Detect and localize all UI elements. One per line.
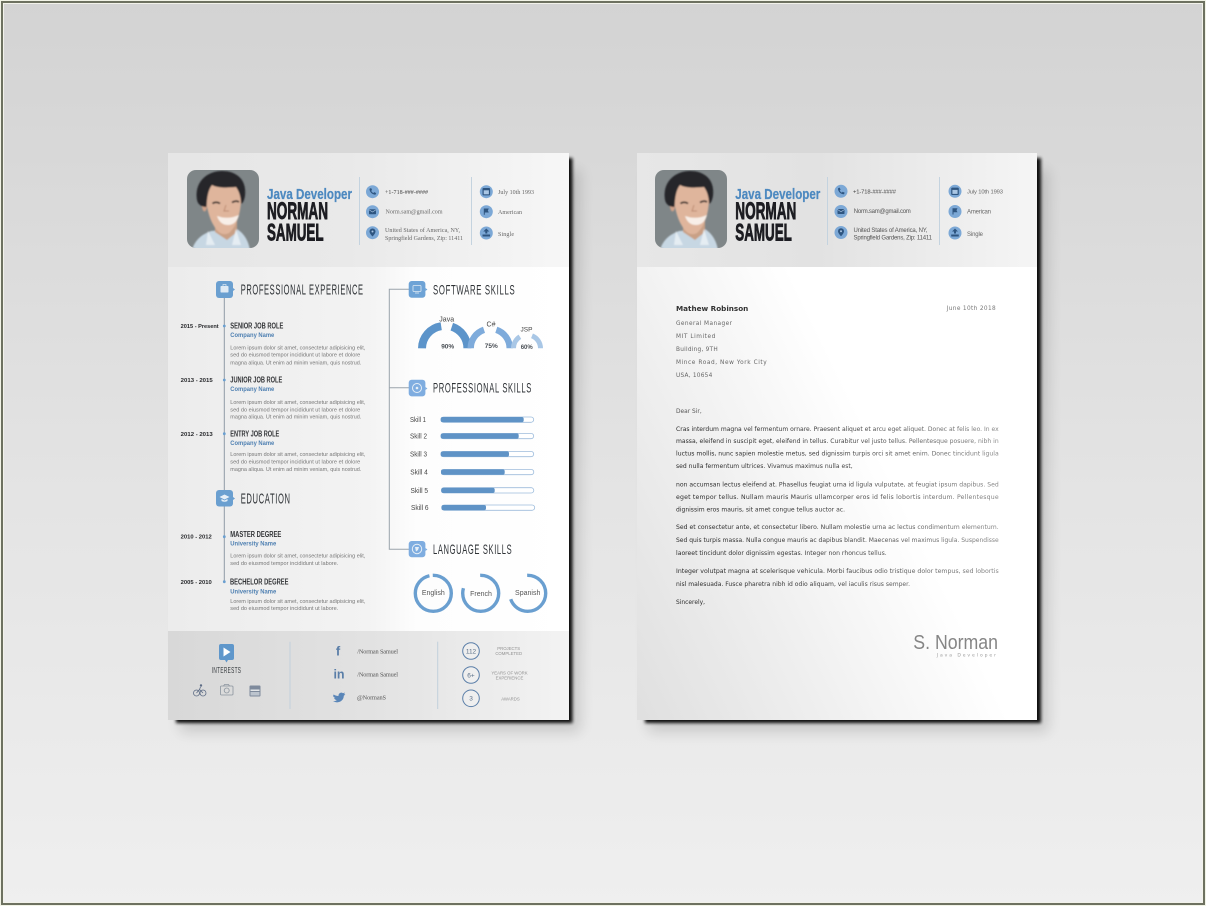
icon: flag bbox=[480, 205, 493, 218]
signature: Java Developer bbox=[936, 652, 996, 658]
entry: junior job role: 2013 - 2015 bbox=[181, 378, 213, 384]
stat: years of experience: 6+ bbox=[467, 672, 475, 679]
icon: briefcase bbox=[216, 281, 235, 298]
stat: projects completed: PROJECTS bbox=[497, 646, 520, 651]
contact dividers bbox=[828, 177, 940, 245]
entry: senior job role: Company Name bbox=[230, 333, 275, 339]
icon: location bbox=[366, 226, 379, 239]
entry: bachelor degree: BECHELOR DEGREE bbox=[230, 578, 289, 586]
paragraph 2: eget tempor tellus. Nullam mauris Mauris ullamcorper eros id felis lobortis interdum. Pellentesque bbox=[676, 494, 999, 501]
linkedin handle: /Norman Samuel bbox=[357, 672, 398, 679]
paragraph 4 bbox=[676, 568, 999, 588]
icon: location bbox=[834, 226, 848, 239]
icon: mail bbox=[366, 205, 379, 218]
paragraph 1: sed nulla fermentum ultrices. Vivamus maximus nulla est, bbox=[676, 463, 853, 470]
stat: awards bbox=[463, 690, 520, 707]
bar: skill 4: Skill 4 bbox=[410, 468, 428, 476]
entry: bachelor degree: University Name bbox=[230, 589, 277, 595]
entry: entry job role: Company Name bbox=[230, 441, 275, 447]
bar: skill 1: Skill 1 bbox=[410, 415, 426, 424]
entry: bachelor degree bbox=[181, 578, 366, 612]
footer dividers bbox=[290, 642, 438, 709]
recipient details: Mince Road, New York City bbox=[676, 360, 767, 366]
address bbox=[385, 227, 463, 242]
entry: senior job role bbox=[181, 322, 366, 366]
address: Springfield Gardens, Zip: 11411 bbox=[385, 235, 463, 242]
recipient details: Building, 9TH bbox=[676, 347, 718, 353]
entry: entry job role bbox=[181, 430, 366, 473]
paragraph 3 bbox=[676, 524, 999, 557]
name: NORMAN bbox=[267, 198, 328, 225]
icon: calendar bbox=[480, 185, 493, 198]
bar: skill 3: Skill 3 bbox=[410, 450, 427, 458]
arc percentages: 75% bbox=[485, 343, 498, 350]
paragraph 3: Sed quis turpis massa. Nulla congue mauris ac dapibus blandit. Maecenas vel maximus ligula. Suspendisse bbox=[676, 537, 999, 544]
stat: years of experience: YEARS OF WORK bbox=[491, 670, 528, 675]
entry: senior job role: Lorem ipsum dolor sit amet, consectetur adipisicing elit, bbox=[230, 345, 366, 351]
photo bbox=[187, 170, 259, 250]
address: United States of America, NY, bbox=[854, 228, 928, 234]
marital status: Single bbox=[498, 232, 514, 238]
entry: master degree bbox=[181, 530, 366, 567]
paragraph 4: Integer volutpat magna at scelerisque vehicula. Morbi faucibus odio tristique dolor tempus, sed lobortis bbox=[676, 568, 999, 575]
entry: senior job role: SENIOR JOB ROLE bbox=[230, 322, 284, 331]
icon: linkedin: in bbox=[333, 668, 345, 682]
paragraph 2: dignissim eros mauris, sit amet congue tellus auctor ac. bbox=[676, 506, 845, 514]
paragraph 1: Cras interdum magna vel fermentum ornare. Praesent aliquet et arcu eget aliquet. Donec at felis leo. In ex bbox=[676, 426, 999, 433]
name: NORMAN bbox=[735, 198, 796, 225]
entry: junior job role: sed do eiusmod tempor incididunt ut labore et dolore bbox=[230, 407, 360, 413]
paragraph 4: nisl malesuada. Fusce pharetra nibh id odio aliquam, vel iaculis risus semper. bbox=[676, 581, 910, 588]
stat: years of experience: EXPERIENCE bbox=[496, 675, 523, 680]
birth date: July 10th 1993 bbox=[967, 190, 1003, 196]
chart: software skill arcs bbox=[422, 316, 540, 351]
arc labels: JSP bbox=[521, 326, 532, 334]
paragraph 2 bbox=[676, 482, 999, 514]
icon: status bbox=[948, 226, 962, 240]
timeline line bbox=[223, 298, 225, 582]
panel: resume header bbox=[168, 153, 569, 267]
heading: professional experience: PROFESSIONAL EXPERIENCE bbox=[241, 282, 364, 298]
facebook handle: /Norman Samuel bbox=[357, 648, 398, 655]
entry: entry job role: 2012 - 2013 bbox=[181, 432, 213, 438]
entry: senior job role: magna aliqua. Ut enim ad minim veniam, quis nostrud. bbox=[230, 360, 362, 366]
heading: education: EDUCATION bbox=[241, 492, 291, 508]
arc percentages: 60% bbox=[521, 345, 533, 351]
email: Norm.sam@gmail.com bbox=[386, 210, 443, 216]
entry: bachelor degree: 2005 - 2010 bbox=[181, 580, 212, 586]
icon: language bbox=[409, 541, 427, 557]
icon: flag bbox=[948, 205, 962, 218]
name: SAMUEL bbox=[267, 220, 324, 246]
icon: status bbox=[480, 226, 493, 240]
chart: language rings bbox=[415, 575, 546, 611]
twitter handle: @NormanS bbox=[357, 694, 386, 702]
bar: skill 6: Skill 6 bbox=[411, 503, 428, 512]
name bbox=[735, 198, 796, 246]
icon: film bbox=[250, 686, 260, 696]
icon: phone bbox=[834, 185, 848, 198]
email: Norm.sam@gmail.com bbox=[854, 209, 911, 215]
entry: junior job role bbox=[181, 376, 366, 421]
paragraph 1 bbox=[676, 426, 999, 470]
address: United States of America, NY, bbox=[385, 227, 460, 234]
icon: graduation cap bbox=[216, 490, 235, 506]
job title: Java Developer bbox=[267, 187, 352, 203]
photo bbox=[655, 170, 727, 250]
phone number: +1-718-###-#### bbox=[385, 190, 428, 196]
ring: french: French bbox=[470, 591, 492, 598]
phone number: +1-718-###-#### bbox=[853, 190, 897, 196]
heading: software skills: SOFTWARE SKILLS bbox=[433, 281, 515, 297]
entry: junior job role: JUNIOR JOB ROLE bbox=[230, 376, 283, 385]
stat: projects completed: COMPLETED bbox=[495, 651, 522, 656]
paragraph 1: massa, eleifend in suscipit eget, eleifend in tellus. Curabitur vel justo tellus. Pellentesque posuere, nibh in bbox=[676, 438, 999, 445]
arc percentages: 90% bbox=[441, 344, 454, 350]
recipient details bbox=[676, 321, 767, 379]
birth date: July 10th 1993 bbox=[498, 190, 534, 196]
entry: junior job role: Lorem ipsum dolor sit amet, consectetur adipisicing elit, bbox=[230, 400, 366, 406]
panel: cover letter page bbox=[637, 153, 1037, 720]
arc percentages bbox=[441, 343, 533, 351]
job title: Java Developer bbox=[735, 187, 821, 203]
icon: software bbox=[409, 281, 427, 298]
ring: spanish: Spanish bbox=[515, 590, 540, 597]
recipient name: Mathew Robinson bbox=[676, 304, 748, 313]
recipient details: MIT Limited bbox=[676, 334, 716, 340]
stat: awards: 3 bbox=[469, 696, 473, 703]
stat: awards: AWARDS bbox=[501, 696, 520, 702]
address bbox=[854, 228, 933, 242]
salutation: Dear Sir, bbox=[676, 408, 702, 415]
icon: twitter bbox=[333, 692, 345, 702]
entry: master degree: 2010 - 2012 bbox=[181, 535, 212, 541]
name: SAMUEL bbox=[735, 220, 792, 246]
entry: entry job role: magna aliqua. Ut enim ad minim veniam, quis nostrud. bbox=[230, 467, 362, 473]
arc: java bbox=[422, 326, 467, 348]
signature: S. Norman bbox=[913, 632, 998, 654]
arc: c sharp bbox=[471, 330, 510, 348]
panel: experience timeline bbox=[181, 281, 366, 612]
stat: projects completed bbox=[463, 643, 522, 659]
panel: skills column bbox=[389, 281, 546, 611]
panel: resume page bbox=[168, 153, 569, 720]
stat: projects completed: 112 bbox=[466, 648, 477, 655]
entry: entry job role: sed do eiusmod tempor incididunt ut labore et dolore bbox=[230, 459, 360, 465]
paragraph 3: Sed et consectetur ante, et consectetur libero. Nullam molestie urna ac lectus condimentum elementum. bbox=[676, 524, 999, 531]
entry: junior job role: magna aliqua. Ut enim ad minim veniam, quis nostrud. bbox=[230, 415, 362, 421]
entry: master degree: University Name bbox=[230, 541, 277, 547]
icon: professional bbox=[409, 380, 427, 396]
arc labels: C# bbox=[487, 322, 496, 328]
icon: phone bbox=[366, 185, 379, 198]
heading: language skills: LANGUAGE SKILLS bbox=[433, 541, 512, 557]
recipient details: General Manager bbox=[676, 321, 733, 327]
closing: Sincerely, bbox=[676, 599, 705, 606]
heading: interests: INTERESTS bbox=[212, 666, 241, 675]
paragraph 1: luctus mollis, nunc sapien molestie metus, sed dignissim turpis orci sit amet enim. Donec tincidunt ligula bbox=[676, 450, 999, 458]
icon: interests play bbox=[219, 644, 234, 662]
entry: entry job role: ENTRY JOB ROLE bbox=[230, 430, 280, 438]
entry: master degree: sed do eiusmod tempor incididunt ut labore. bbox=[230, 561, 339, 567]
bar: skill 5: Skill 5 bbox=[410, 486, 428, 495]
icon: calendar bbox=[948, 185, 962, 198]
entry: senior job role: 2015 - Present bbox=[181, 324, 219, 330]
panel: letter header bbox=[637, 153, 1037, 267]
entry: master degree: Lorem ipsum dolor sit amet, consectetur adipisicing elit, bbox=[230, 553, 366, 559]
entry: bachelor degree: Lorem ipsum dolor sit amet, consectetur adipisicing elit, bbox=[230, 599, 366, 605]
stat: years of experience bbox=[463, 667, 528, 683]
address: Springfield Gardens, Zip: 11411 bbox=[854, 236, 933, 242]
nationality: American bbox=[498, 210, 522, 216]
heading: professional skills: PROFESSIONAL SKILLS bbox=[433, 380, 532, 396]
recipient block bbox=[676, 304, 767, 379]
chart: skill bars bbox=[410, 415, 535, 512]
nationality: American bbox=[967, 210, 991, 216]
name bbox=[267, 198, 328, 246]
arc: jsp bbox=[514, 336, 540, 348]
marital status: Single bbox=[967, 232, 984, 238]
icon: camera bbox=[220, 684, 233, 695]
bracket connector bbox=[389, 289, 409, 549]
page shadows bbox=[176, 158, 1048, 732]
bar: skill 2: Skill 2 bbox=[410, 432, 427, 440]
paragraph 3: laoreet tincidunt dolor dignissim egestas. Integer non rhoncus tellus. bbox=[676, 550, 887, 557]
icon: facebook: f bbox=[336, 644, 341, 658]
icon: bicycle bbox=[194, 685, 206, 696]
entry: senior job role: sed do eiusmod tempor incididunt ut labore et dolore bbox=[230, 353, 360, 359]
entry: bachelor degree: sed do eiusmod tempor incididunt ut labore. bbox=[230, 606, 339, 612]
ring: english: English bbox=[422, 590, 445, 597]
arc labels: Java bbox=[439, 316, 454, 324]
contact dividers bbox=[360, 177, 472, 245]
arc labels bbox=[439, 316, 532, 334]
icon: mail bbox=[834, 205, 848, 218]
letter body bbox=[676, 426, 999, 606]
entry: junior job role: Company Name bbox=[230, 387, 275, 393]
letter date: June 10th 2018 bbox=[946, 306, 996, 312]
recipient details: USA, 10654 bbox=[676, 373, 713, 379]
panel: resume footer bbox=[168, 631, 569, 720]
entry: entry job role: Lorem ipsum dolor sit amet, consectetur adipisicing elit, bbox=[230, 452, 366, 458]
entry: master degree: MASTER DEGREE bbox=[230, 530, 282, 539]
paragraph 2: non accumsan lectus eleifend at. Phasellus feugiat urna id ligula vulputate, at feugiat ipsum dapibus. Sed bbox=[676, 482, 999, 488]
